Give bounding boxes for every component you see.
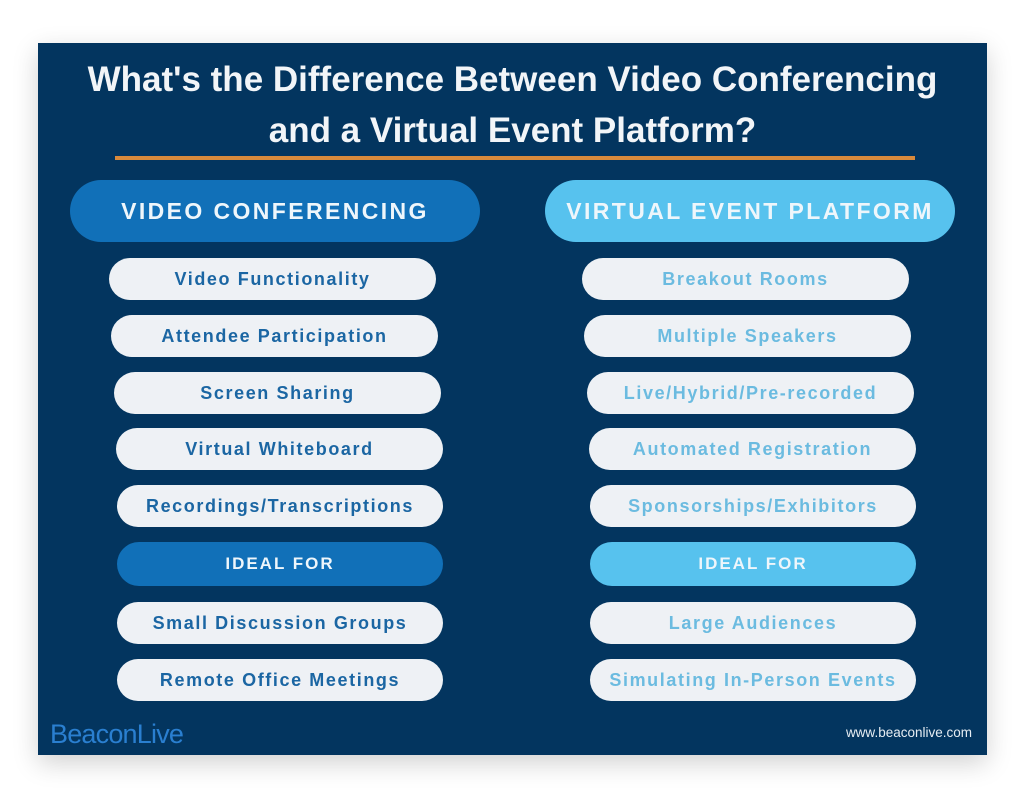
left column items: Virtual Whiteboard [185, 438, 374, 458]
right column items: Multiple Speakers [657, 326, 838, 346]
left column items: IDEAL FOR [225, 554, 335, 573]
title [88, 60, 937, 150]
right column items: IDEAL FOR [698, 554, 808, 573]
title: What's the Difference Between Video Conferencing [88, 60, 937, 99]
left column items: Attendee Participation [161, 326, 388, 346]
header: virtual event platform: VIRTUAL EVENT PLATFORM [566, 198, 934, 224]
header: virtual event platform [545, 180, 955, 242]
right column items: Large Audiences [669, 612, 837, 632]
right column items: Live/Hybrid/Pre-recorded [624, 382, 877, 402]
left column items: Remote Office Meetings [160, 670, 400, 690]
logo: BeaconLive [50, 719, 183, 749]
header: video conferencing [70, 180, 480, 242]
left column items: Screen Sharing [200, 382, 355, 402]
right column items: Sponsorships/Exhibitors [628, 496, 878, 516]
right column items: Automated Registration [633, 438, 872, 458]
right column items: Breakout Rooms [662, 268, 829, 288]
website: www.beaconlive.com [846, 725, 972, 740]
left column items [109, 258, 443, 701]
left column items: Recordings/Transcriptions [146, 496, 414, 516]
right column items: Simulating In-Person Events [609, 670, 897, 690]
left column items: Video Functionality [174, 268, 371, 288]
orange divider [115, 156, 915, 160]
left column items: Small Discussion Groups [153, 612, 407, 632]
title: and a Virtual Event Platform? [269, 111, 756, 150]
header: video conferencing: VIDEO CONFERENCING [121, 198, 429, 224]
right column items [582, 258, 916, 701]
